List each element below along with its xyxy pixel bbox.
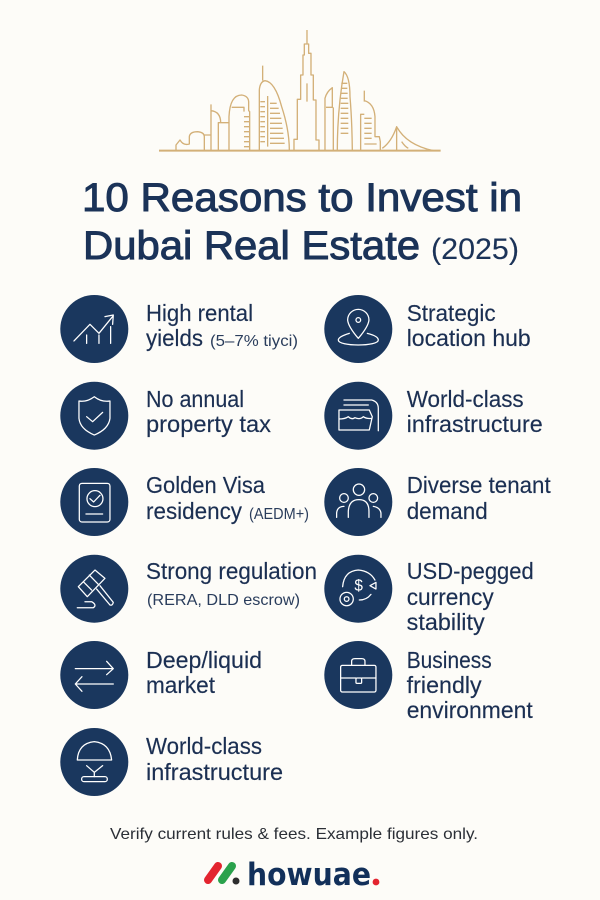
- item: strategic location hub: Strategic: [407, 300, 496, 326]
- item: world-class infrastructure left: [60, 728, 283, 796]
- icon: people: [337, 484, 381, 517]
- item: no annual property tax: [60, 382, 272, 450]
- item: diverse tenant demand: demand: [407, 498, 488, 524]
- item: golden visa residency: [60, 468, 309, 536]
- icon: exchange arrows: [75, 661, 113, 691]
- item: diverse tenant demand: [324, 468, 551, 536]
- item: business friendly environment: [324, 641, 533, 723]
- icon: map pin: [338, 309, 378, 345]
- icon: port: [339, 400, 378, 431]
- item: diverse tenant demand: Diverse tenant: [407, 472, 551, 498]
- item: high rental yields: (5–7% tiyci): [210, 333, 298, 350]
- item: business friendly environment: Business: [407, 647, 492, 673]
- item: golden visa residency: residency: [146, 498, 242, 524]
- item: golden visa residency: (AEDM+): [249, 506, 309, 523]
- item: business friendly environment: environment: [407, 697, 533, 723]
- item: strong regulation: Strong regulation: [146, 558, 317, 584]
- icon: dome: [77, 742, 112, 782]
- item: high rental yields: High rental: [146, 300, 253, 326]
- item: high rental yields: [60, 295, 298, 363]
- icon: shield: [79, 397, 110, 435]
- icon: passport: [79, 483, 110, 522]
- icon: currency cycle: [340, 570, 376, 606]
- item: golden visa residency: Golden Visa: [146, 472, 265, 498]
- item: world-class infrastructure right: [324, 382, 543, 450]
- item: business friendly environment: friendly: [407, 672, 482, 698]
- item: deep liquid market: market: [146, 672, 216, 698]
- item: world-class infrastructure left: World-class: [146, 733, 262, 759]
- item: deep liquid market: Deep/liquid: [146, 647, 262, 673]
- item: no annual property tax: property tax: [146, 411, 272, 437]
- item: usd-pegged currency stability: stability: [407, 609, 485, 635]
- item: strong regulation: [60, 555, 317, 623]
- icon: briefcase: [341, 659, 376, 692]
- logo: howuae: howuae: [247, 857, 371, 893]
- icon: currency cycle: $: [354, 578, 363, 595]
- item: world-class infrastructure right: World-class: [407, 386, 524, 412]
- skyline illustration: [159, 30, 441, 151]
- icon: rising chart: [74, 315, 113, 343]
- item: strategic location hub: [324, 295, 531, 363]
- item: world-class infrastructure left: infrastructure: [146, 759, 283, 785]
- title: (2025): [431, 233, 519, 266]
- title: Dubai Real Estate: [83, 224, 420, 268]
- item: no annual property tax: No annual: [146, 386, 244, 412]
- item: usd-pegged currency stability: currency: [407, 584, 494, 610]
- title: 10 Reasons to Invest in: [82, 176, 522, 220]
- disclaimer: Verify current rules & fees. Example figures only.: [110, 826, 478, 843]
- item: strategic location hub: location hub: [407, 325, 531, 351]
- item: deep liquid market: [60, 641, 262, 709]
- title: [82, 176, 522, 268]
- item: usd-pegged currency stability: USD-pegged: [407, 558, 534, 584]
- item: usd-pegged currency stability: [324, 555, 534, 635]
- icon: gavel: [77, 570, 113, 608]
- item: strong regulation: (RERA, DLD escrow): [147, 592, 300, 609]
- item: high rental yields: yields: [146, 325, 203, 351]
- item: world-class infrastructure right: infrastructure: [407, 411, 543, 437]
